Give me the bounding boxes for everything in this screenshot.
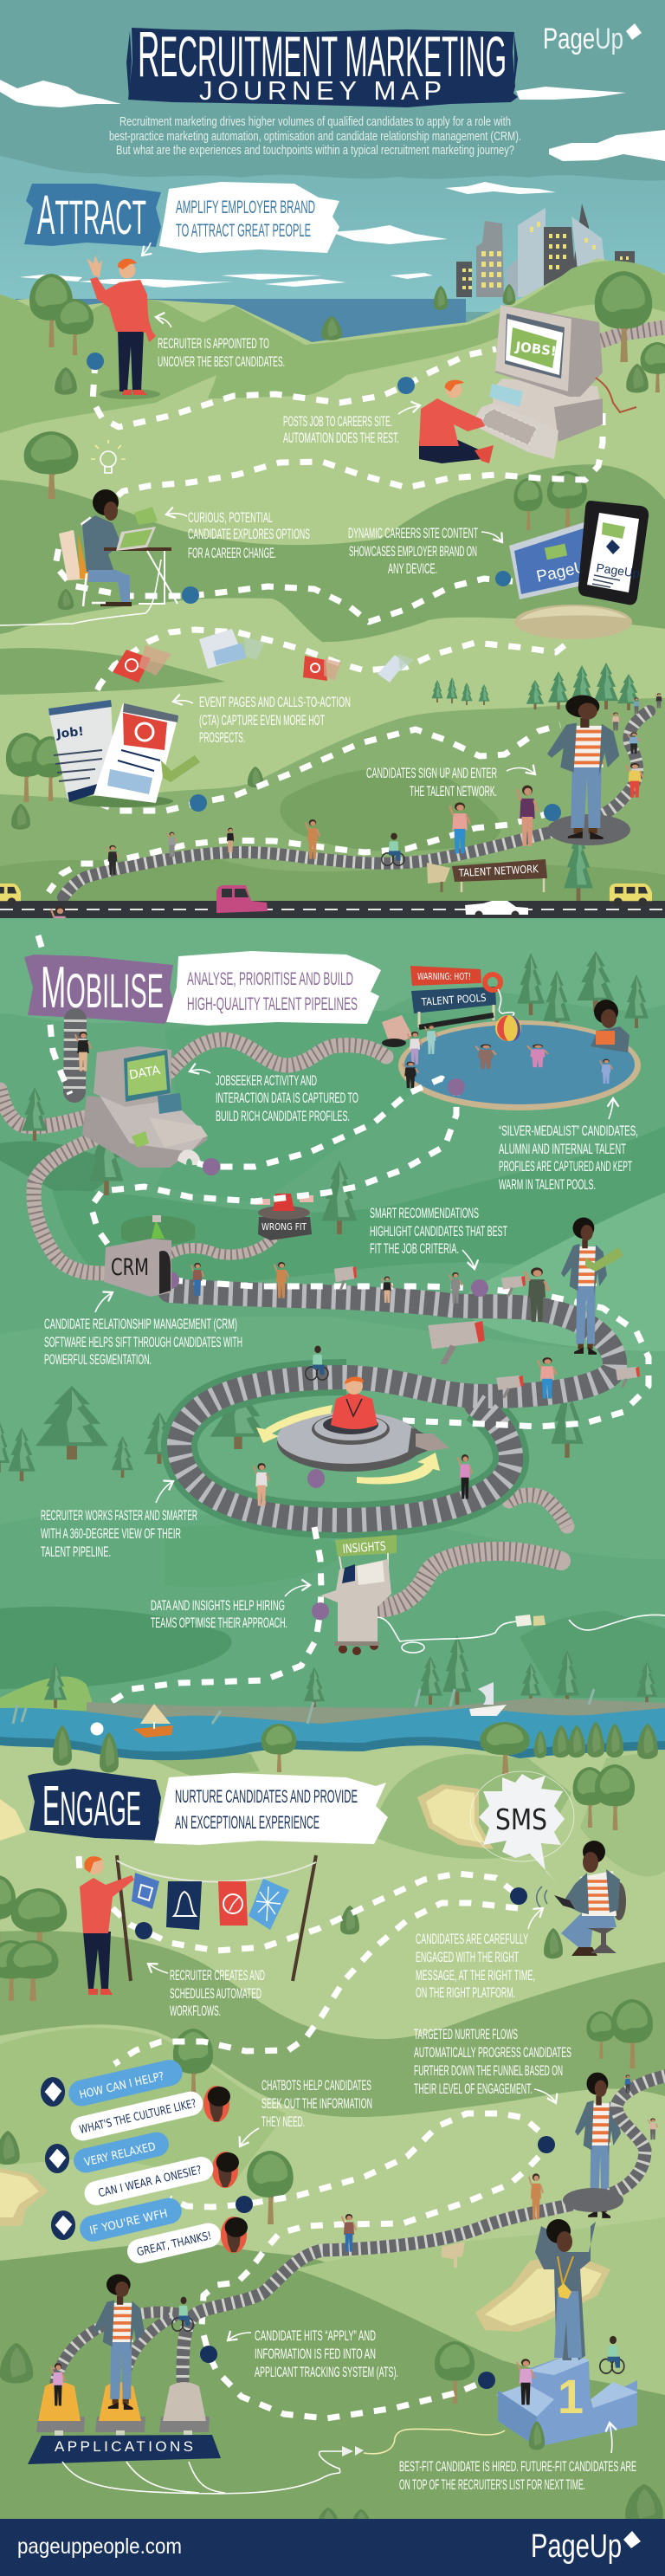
yellow arrows — [256, 1405, 332, 1443]
tag: Engage — [28, 1769, 161, 1841]
logo: PageUp: PageUp — [543, 23, 623, 55]
sign: Talent Network: TALENT NETWORK — [458, 863, 539, 879]
callout: dynamic careers site: ANY DEVICE. — [388, 560, 437, 577]
icon: green tick — [161, 755, 200, 782]
banner: Attract strapline — [159, 182, 339, 253]
small candidates in Engage — [51, 2074, 658, 2406]
figure: recruiter posts job — [419, 380, 494, 463]
sign: Talent pools — [411, 987, 496, 1013]
numeral 1: 1 — [558, 2369, 584, 2424]
callout: dynamic careers site — [348, 525, 478, 577]
panel: Engage heading: NURTURE CANDIDATES AND PROVIDE — [175, 1787, 358, 1807]
flag: network — [249, 1879, 289, 1930]
callout: event pages: PROSPECTS. — [199, 729, 245, 746]
bubble: Very relaxed — [71, 2130, 171, 2175]
intro text: Recruitment marketing drives higher volumes of qualified candidates to apply for a role with — [119, 114, 511, 129]
journey path: Mobilise dashes — [38, 935, 649, 1770]
bubble: Very relaxed: VERY RELAXED — [83, 2140, 157, 2170]
callouts: Engage — [170, 1931, 636, 2493]
footer url: pageuppeople.com — [17, 2534, 182, 2559]
callout: event pages: EVENT PAGES AND CALLS-TO-ACTION — [199, 694, 351, 710]
callout: curious candidate: CANDIDATE EXPLORES OPTIONS — [188, 526, 310, 542]
callout: candidate applies: INFORMATION IS FED INTO AN — [255, 2346, 376, 2362]
clouds — [0, 80, 665, 288]
vehicle: yellow van left — [0, 883, 21, 906]
callouts: Attract: SHOWCASES EMPLOYER BRAND ON — [349, 543, 477, 560]
label: SMS: SMS — [495, 1803, 547, 1836]
chatbot conversation — [41, 2057, 248, 2266]
callout: chatbots: CHATBOTS HELP CANDIDATES — [261, 2077, 371, 2094]
bubble: Onesie — [82, 2154, 216, 2208]
callout: targeted nurture — [414, 2026, 571, 2097]
callout: CRM software — [44, 1316, 242, 1368]
callout: candidate applies — [255, 2327, 398, 2380]
figure: recruiter waving — [87, 255, 160, 399]
small candidates on track — [107, 693, 663, 875]
flag: bell — [166, 1881, 202, 1930]
track to data machine — [74, 1019, 75, 1091]
footer bar — [0, 2519, 665, 2576]
label: Jobs!: JOBS! — [514, 339, 558, 359]
candidate on nurture flow — [575, 2073, 621, 2218]
callout: CRM software: SOFTWARE HELPS SIFT THROUGH CANDIDATES WITH — [44, 1334, 242, 1350]
banner: Applications — [28, 2435, 221, 2464]
tag: Attract — [24, 184, 161, 247]
callout: data and insights — [151, 1597, 287, 1631]
panel: Attract heading — [24, 182, 339, 253]
small candidates in Mobilise — [191, 1262, 557, 1506]
callout: silver medalists — [499, 1123, 638, 1193]
talent pool: TALENT POOLS — [420, 992, 487, 1008]
kiosk: Insights — [320, 1535, 665, 1655]
talent pool — [382, 966, 641, 1110]
figure: candidate with tick — [561, 1218, 623, 1355]
callout: smart recommendations: HIGHLIGHT CANDIDATES THAT BEST — [370, 1223, 507, 1239]
computer: jobs — [471, 305, 636, 459]
bubble: Culture — [68, 2089, 205, 2143]
banner: Mobilise strapline — [166, 951, 381, 1026]
figure: recruiter with workflow flags — [80, 1855, 316, 1995]
vehicle: yellow van right — [610, 883, 652, 906]
turret with recruiter — [256, 1376, 449, 1484]
panel: Mobilise heading: ANALYSE, PRIORITISE AND BUILD — [187, 969, 353, 989]
vehicle: magenta car — [216, 885, 268, 913]
pipe from jobs computer — [584, 327, 665, 346]
floating job cards — [113, 629, 414, 683]
trees in Engage — [0, 1722, 663, 2532]
bubble: Great thanks — [125, 2221, 223, 2266]
machine: CRM — [104, 1215, 195, 1297]
candidates at poolside — [75, 1025, 437, 1088]
intro text — [109, 114, 521, 158]
speech burst: SMS — [470, 1771, 574, 1883]
figure: candidate at applications — [94, 2275, 145, 2410]
wires — [62, 2451, 342, 2494]
panel: Mobilise heading: MOBILISE — [41, 955, 164, 1020]
panel: Engage heading: AN EXCEPTIONAL EXPERIENCE — [175, 1813, 320, 1833]
label: PageUp on phone: PageUp — [596, 560, 641, 580]
river with boats — [0, 1682, 665, 1760]
panel: Attract heading: AMPLIFY EMPLOYER BRAND — [176, 197, 315, 217]
label: CRM: CRM — [111, 1254, 149, 1281]
label: Data screen: DATA — [128, 1064, 162, 1083]
panel: Mobilise heading: HIGH-QUALITY TALENT PIPELINES — [187, 994, 358, 1014]
reeds — [13, 1689, 594, 1724]
trees in Attract — [6, 271, 665, 901]
siren and wrong fit box — [255, 1194, 313, 1240]
callout: posts job: POSTS JOB TO CAREERS SITE. — [283, 413, 392, 430]
callout: recruiter appointed: UNCOVER THE BEST CANDIDATES. — [158, 353, 285, 370]
journey stops: Mobilise markers — [162, 1078, 488, 1620]
chatbot avatars — [41, 2077, 75, 2240]
road with cars — [0, 883, 665, 1733]
callout: targeted nurture: TARGETED NURTURE FLOWS — [414, 2026, 518, 2042]
callout: best-fit hired — [399, 2458, 636, 2493]
candidate avatars — [203, 2086, 248, 2253]
beach ball — [495, 1015, 521, 1041]
callout: carefully engaged: CANDIDATES ARE CAREFULLY — [416, 1931, 528, 1947]
tag: Mobilise — [24, 955, 175, 1024]
bubble: Onesie: CAN I WEAR A ONESIE? — [97, 2164, 203, 2200]
keyboard — [471, 403, 558, 459]
panel: Mobilise heading — [24, 951, 381, 1026]
callout: jobseeker activity: JOBSEEKER ACTIVITY AND — [216, 1072, 317, 1089]
callout arrows — [95, 243, 613, 2453]
icon: green tick — [585, 1247, 623, 1272]
railway track: applications — [55, 2076, 665, 2382]
callout: jobseeker activity: BUILD RICH CANDIDATE PROFILES. — [216, 1108, 350, 1124]
talent pool: WARNING: HOT! — [417, 971, 471, 982]
callout: candidates sign up: CANDIDATES SIGN UP AND ENTER — [366, 765, 497, 781]
callout: carefully engaged: ON THE RIGHT PLATFORM. — [416, 1984, 515, 2001]
callout: carefully engaged: MESSAGE, AT THE RIGHT TIME, — [416, 1967, 535, 1984]
sign: Warning hot — [410, 966, 481, 986]
callout: smart recommendations: SMART RECOMMENDATIONS — [370, 1205, 479, 1221]
city skyline — [456, 204, 635, 297]
callouts: Attract — [158, 335, 497, 799]
journey path: Engage dashes — [79, 1856, 539, 2418]
figure: candidate seated with device — [537, 1841, 626, 1956]
panel: Engage heading — [28, 1769, 388, 1845]
callout: carefully engaged: ENGAGED WITH THE RIGHT — [416, 1949, 519, 1965]
callout: posts job — [283, 413, 399, 446]
banner: Engage strapline — [154, 1773, 388, 1845]
device: tablet and phone on stone — [509, 501, 649, 639]
figure: candidate at talent network — [547, 696, 619, 839]
applications carts and banner — [28, 2382, 505, 2494]
callout: recruiter workflows — [170, 1967, 265, 2019]
bubble: How can I help: HOW CAN I HELP? — [78, 2070, 165, 2102]
background: sky — [0, 0, 665, 312]
sign: arrow post — [442, 2242, 465, 2268]
callout: targeted nurture: THEIR LEVEL OF ENGAGEMENT. — [414, 2081, 533, 2097]
callout: recruiter workflows: WORKFLOWS. — [170, 2003, 221, 2019]
boat: tan sail — [140, 1704, 171, 1724]
callout: smart recommendations: FIT THE JOB CRITERIA. — [370, 1240, 459, 1257]
callouts: Engage: RECRUITER CREATES AND — [170, 1967, 265, 1984]
flag: calendar — [132, 1873, 159, 1909]
sand patches — [417, 1784, 494, 1849]
power cord — [378, 1615, 665, 1641]
callout: curious candidate — [188, 509, 310, 561]
background: Engage land — [0, 1728, 665, 2521]
callout: event pages — [199, 694, 351, 746]
security cameras — [334, 1266, 640, 1398]
railway track: talent network — [63, 711, 649, 897]
trees in Mobilise — [0, 951, 657, 1709]
intro text: But what are the experiences and touchpoints within a typical recruitment marketing journey? — [116, 143, 514, 158]
panel: Attract heading: TO ATTRACT GREAT PEOPLE — [176, 221, 311, 241]
callout: jobseeker activity: INTERACTION DATA IS CAPTURED TO — [216, 1090, 358, 1106]
figure: candidate in pool — [591, 1026, 629, 1052]
bubble: Culture: WHAT'S THE CULTURE LIKE? — [78, 2097, 197, 2137]
callout: dynamic careers site: DYNAMIC CAREERS SITE CONTENT — [348, 525, 478, 541]
bubble: If you're WFH — [77, 2196, 184, 2244]
callout: recruiter 360 view: TALENT PIPELINE. — [41, 1544, 111, 1560]
journey stops: Attract markers — [87, 353, 561, 821]
callout: recruiter workflows: SCHEDULES AUTOMATED — [170, 1985, 261, 2002]
applications carts and banner: APPLICATIONS — [55, 2438, 193, 2455]
callout: event pages: (CTA) CAPTURE EVEN MORE HOT — [199, 712, 325, 728]
figure: candidate at desk — [0, 489, 178, 625]
label: Wrong fit: WRONG FIT — [261, 1222, 307, 1233]
label: Job! on document: Job! — [55, 725, 84, 741]
callout: data and insights: TEAMS OPTIMISE THEIR APPROACH. — [151, 1615, 287, 1631]
icon: diamond — [626, 23, 642, 40]
icon: tablet — [116, 527, 156, 551]
callout: chatbots: THEY NEED. — [261, 2113, 305, 2130]
podium with winner — [496, 2219, 638, 2450]
icon: light bulb — [91, 440, 126, 473]
footer diamond — [623, 2531, 641, 2548]
boat: white sail — [478, 1682, 494, 1705]
callout: data and insights: DATA AND INSIGHTS HELP HIRING — [151, 1597, 285, 1614]
callout: curious candidate: FOR A CAREER CHANGE. — [188, 545, 276, 561]
figure: candidate under road — [51, 906, 68, 952]
bubble: If you're WFH: IF YOU'RE WFH — [88, 2207, 169, 2238]
background: sea — [16, 299, 466, 359]
background: Attract land and hills — [0, 258, 665, 920]
heading: Journey Map: JOURNEY MAP — [199, 75, 442, 106]
background: Mobilise hills — [0, 918, 665, 1711]
journey stop: river crossing — [90, 1722, 104, 1736]
journey stops: Engage markers — [135, 1887, 555, 2389]
sign: Talent Network — [427, 859, 547, 892]
callout: recruiter appointed: RECRUITER IS APPOINTED TO — [158, 335, 269, 352]
pipes in Mobilise — [0, 1039, 567, 1608]
railway track: CRM to ring — [170, 1291, 615, 1520]
callout: recruiter 360 view: WITH A 360-DEGREE VIEW OF THEIR — [41, 1525, 181, 1542]
machine: Data — [82, 1046, 208, 1168]
callout: smart recommendations — [370, 1205, 507, 1257]
callout: jobseeker activity — [216, 1072, 358, 1124]
footer logo: PageUp — [531, 2528, 622, 2565]
callout: carefully engaged — [416, 1931, 535, 2001]
callout: curious candidate: CURIOUS, POTENTIAL — [188, 509, 273, 526]
label: Insights: INSIGHTS — [342, 1540, 386, 1557]
bubble: How can I help — [66, 2057, 185, 2108]
callout: chatbots: SEEK OUT THE INFORMATION — [261, 2095, 372, 2112]
callout: CRM software: CANDIDATE RELATIONSHIP MANAGEMENT (CRM) — [44, 1316, 237, 1332]
label: PageUp on tablet: PageUp — [535, 556, 597, 586]
callout: candidates sign up — [366, 765, 497, 799]
pool water — [398, 1020, 641, 1110]
flag: clock — [218, 1881, 248, 1926]
documents: job page and event page — [48, 700, 200, 807]
bubble: Great thanks: GREAT, THANKS! — [136, 2230, 213, 2259]
callout: CRM software: POWERFUL SEGMENTATION. — [44, 1351, 152, 1368]
panel: Attract heading: ATTRACT — [37, 184, 146, 246]
callout: recruiter 360 view — [41, 1507, 197, 1560]
callout: posts job: AUTOMATION DOES THE REST. — [283, 430, 399, 446]
journey path: Attract dashes — [48, 349, 603, 892]
callout: chatbots — [261, 2077, 372, 2130]
callout: recruiter appointed — [158, 335, 285, 370]
callout: candidates sign up: THE TALENT NETWORK. — [410, 783, 497, 799]
intro text: best-practice marketing automation, optimisation and candidate relationship management (CRM). — [109, 129, 521, 144]
callout: candidate applies: CANDIDATE HITS “APPLY” AND — [255, 2327, 376, 2344]
panel: Engage heading: ENGAGE — [42, 1774, 141, 1837]
title banner — [126, 18, 518, 107]
callout: candidate applies: APPLICANT TRACKING SYSTEM (ATS). — [255, 2364, 398, 2380]
callouts: Mobilise — [41, 1072, 638, 1631]
icon: lifebuoy — [485, 974, 500, 990]
vehicle: white pick-up — [465, 901, 528, 915]
callouts: Mobilise: RECRUITER WORKS FASTER AND SMARTER — [41, 1507, 197, 1524]
